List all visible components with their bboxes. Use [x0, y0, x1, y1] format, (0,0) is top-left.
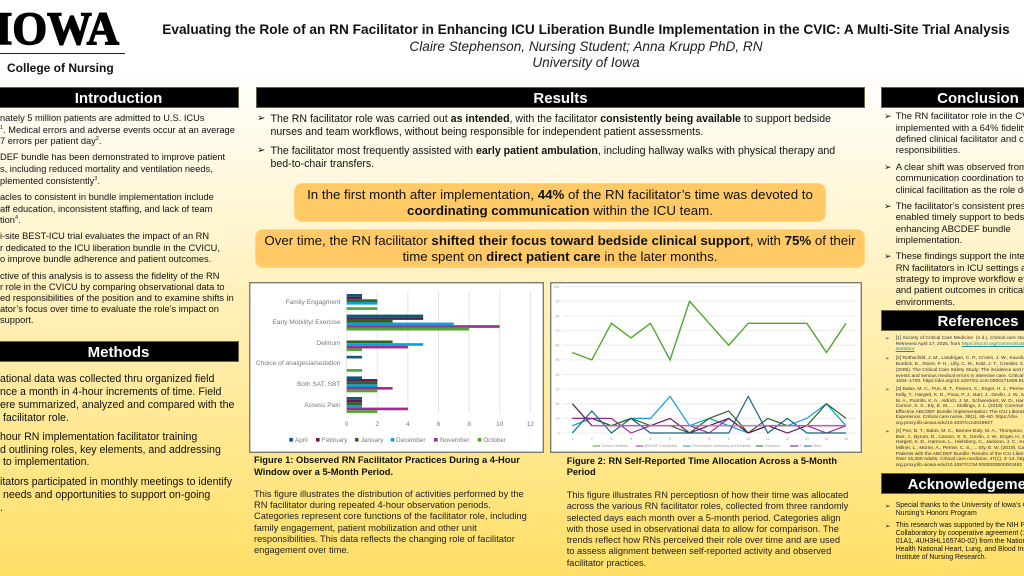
- value axis labels: 2: [376, 421, 380, 428]
- text: introduction paragraphs: nately 5 million patients are admitted to U.S. ICUs: [0, 113, 204, 123]
- legend: Clinical Facilitator: [601, 444, 629, 448]
- day axis labels: 4: [630, 437, 632, 441]
- day axis labels: 8: [708, 437, 710, 441]
- figure 2 description: across the various RN facilitator roles, collected from three randomly: [567, 501, 848, 511]
- college name: College of Nursing: [7, 61, 114, 75]
- figure 2 title: Period: [567, 467, 596, 477]
- callout: 75 percent direct patient care: [255, 229, 865, 268]
- legend: October: [483, 437, 507, 444]
- bullet: consistent presence: enhancing ABCDEF bundle: [896, 224, 1011, 235]
- caption: figure 1: [254, 455, 527, 555]
- value axis labels: 40: [556, 373, 560, 377]
- bullet: role carried out as intended: [257, 113, 831, 138]
- poster title: Evaluating the Role of an RN Facilitator in Enhancing ICU Liberation Bundle Implementation in the CVIC: A Multi-Site Trial Analysis: [162, 22, 1010, 37]
- text: introduction paragraphs: acles to consistent in bundle implementation include: [0, 192, 214, 202]
- reference 2: [885, 356, 1024, 384]
- reference 4: org.proxy.lib.uiowa.edu/10.1097/CCM.0000000000003482: [896, 463, 1022, 468]
- line chart: RN self-reported time allocation: [550, 282, 862, 453]
- text: introduction paragraphs: ed responsibilities of the position and to examine shifts in: [0, 293, 234, 303]
- text: introduction paragraphs: DEF bundle has been demonstrated to improve patient: [0, 152, 225, 162]
- series: ABCDEF Coordinator: [572, 418, 846, 433]
- heading: Methods: [0, 341, 239, 362]
- figure 1 title: Figure 1: Observed RN Facilitator Practices During a 4-Hour: [254, 455, 520, 465]
- value axis labels: 100: [554, 285, 560, 289]
- text: introduction paragraphs: r dedicated to the ICU liberation bundle in the CVICU,: [0, 243, 220, 253]
- series: Other: [572, 396, 846, 433]
- bullet: NIH funding: Institute of Nursing Research.: [896, 554, 986, 561]
- figure 1 description: RN facilitator during repeated 4-hour observation periods.: [254, 500, 491, 510]
- reference 3: ➢: [885, 387, 890, 393]
- text: methods paragraphs: to implementation.: [3, 456, 90, 468]
- legend: April: [295, 437, 308, 444]
- text: methods paragraphs: .: [0, 502, 3, 514]
- legend: January: [361, 437, 384, 444]
- text: introduction paragraphs: ator’s focus over time to evaluate the role’s impact on: [0, 304, 219, 314]
- figure 2 description: trends reflect how RNs perceived their role over time and are used: [567, 535, 840, 545]
- panel: methods: [0, 341, 239, 514]
- heading: Conclusion: Conclusion: [937, 90, 1019, 107]
- legend: Champion: [764, 444, 780, 448]
- legend: [593, 444, 822, 448]
- legend: February: [322, 437, 348, 444]
- text: methods paragraphs: hour RN implementation facilitator training: [0, 431, 197, 443]
- callout: 75 percent direct patient care: time spent on direct patient care in the later months.: [403, 249, 717, 264]
- reference 1: [885, 336, 1024, 352]
- text: methods paragraphs: d outlining roles, key elements, and addressing: [0, 444, 221, 456]
- series: December: [347, 302, 454, 408]
- figure 1 description: family engagement, patient mobilization and other unit: [254, 523, 477, 533]
- figure 2 title: Figure 2: RN Self-Reported Time Allocation Across a 5-Month: [567, 456, 837, 466]
- reference 4: [885, 428, 1024, 468]
- day axis labels: 2: [591, 437, 593, 441]
- series: November: [347, 325, 500, 410]
- value axis labels: 20: [556, 402, 560, 406]
- day axis labels: 3: [610, 437, 612, 441]
- series: April: [347, 294, 423, 400]
- bar chart: observed RN facilitator practices: [249, 282, 544, 453]
- text: introduction paragraphs: i-site BEST-ICU trial evaluates the impact of an RN: [0, 231, 209, 241]
- bullet: 64 percent fidelity: [884, 111, 1024, 156]
- category labels: Delirium: [316, 340, 341, 347]
- reference 3: [885, 386, 1024, 426]
- bullet: 64 percent fidelity: responsibilities.: [896, 145, 960, 156]
- authors: Claire Stephenson, Nursing Student; Anna Krupp PhD, RN: [409, 39, 763, 54]
- day axis labels: 12: [785, 437, 789, 441]
- text: methods paragraphs: ere summarized, analyzed and compared with the: [0, 399, 234, 411]
- figure 1 title: [254, 455, 520, 477]
- bullet: clear shift: communication coordination to: [896, 173, 1024, 184]
- day axis labels: 13: [805, 437, 809, 441]
- value axis labels: 10: [496, 421, 504, 428]
- text: introduction paragraphs: r role in the CVICU by comparing observational data to: [0, 282, 225, 292]
- heading: Methods: Methods: [88, 344, 149, 361]
- text: introduction paragraphs: ctive of this analysis is to assess the fidelity of the RN: [0, 271, 219, 281]
- heading: Introduction: Introduction: [75, 90, 162, 107]
- series: Champion: [572, 404, 846, 433]
- value axis labels: 30: [556, 387, 560, 391]
- category labels: [256, 299, 341, 409]
- text: introduction paragraphs: 7 errors per patient day2.: [0, 136, 101, 146]
- legend: November: [440, 437, 470, 444]
- value axis labels: 60: [556, 344, 560, 348]
- heading: Results: [256, 87, 865, 108]
- bullet: honors program thanks: Nursing’s Honors Program: [896, 510, 977, 517]
- bullet: findings support: [884, 251, 1024, 308]
- day axis labels: 9: [728, 437, 730, 441]
- bullet: clear shift: A clear shift was observed from: [896, 162, 1024, 173]
- callout: 75 percent direct patient care: Over time, the RN facilitator shifted their focus toward bedside clinical support, with 75% of their: [264, 233, 856, 248]
- value axis labels: 4: [406, 421, 410, 428]
- heading: References: References: [938, 313, 1018, 330]
- legend: Performance monitoring and feedback: [692, 444, 751, 448]
- text: methods paragraphs: nce a month in 4-hour increments of time. Field: [0, 386, 221, 398]
- text: methods paragraphs: facilitator role.: [3, 412, 69, 424]
- callout: 44 percent coordinating communication: [294, 183, 826, 222]
- text: methods paragraphs: [0, 373, 234, 514]
- bullet: clear shift: [884, 162, 1024, 196]
- day axis labels: 1: [571, 437, 573, 441]
- legend: [289, 437, 507, 444]
- heading: Results: Results: [533, 90, 588, 107]
- bullet: consistent presence: ➢: [884, 202, 892, 212]
- figure 2 description: to assess alignment between self-reported activity and observed: [567, 546, 831, 556]
- figure 2 description: selected days each month over a 5-month period. Categories align: [567, 513, 841, 523]
- text: introduction paragraphs: support.: [0, 315, 33, 325]
- day axis labels: 5: [650, 437, 652, 441]
- reference 2: ➢: [885, 356, 890, 362]
- reference 3: Experience. Critical care nurse, 39(1), 46–60. https://doi-: [896, 415, 1018, 420]
- value axis labels: 70: [556, 329, 560, 333]
- bullet: early patient ambulation: bed-to-chair transfers.: [270, 158, 374, 170]
- value axis labels: [554, 285, 560, 435]
- value axis labels: [345, 421, 534, 428]
- figure 1 description: This figure illustrates the distribution of activities performed by the: [254, 489, 524, 499]
- heading: Acknowledgements: [881, 473, 1024, 494]
- bullet: consistent presence: [884, 201, 1024, 246]
- day axis labels: 11: [766, 437, 770, 441]
- day axis labels: 14: [824, 437, 828, 441]
- bullet: findings support: ➢: [884, 252, 892, 262]
- figure 2 description: This figure illustrates RN perceptiosn of how their time was allocated: [567, 490, 848, 500]
- figure 1 description: [254, 489, 527, 555]
- day axis labels: 10: [746, 437, 750, 441]
- figure 2 description: with those used in observational data to allow for comparison. The: [567, 524, 839, 534]
- bullet: role carried out as intended: ➢: [257, 113, 265, 124]
- figure 1 description: responsibilities. This data reflects the changing role of facilitator: [254, 534, 515, 544]
- text: introduction paragraphs: o improve bundle adherence and patient outcomes.: [0, 254, 211, 264]
- bullet: NIH funding: [885, 522, 1024, 561]
- logo rule: [0, 53, 125, 54]
- series: Clinical Facilitator: [572, 301, 846, 360]
- bullet: role carried out as intended: nurses and team workflows, without being responsible for independent patient assessments.: [270, 126, 703, 138]
- callout: 44 percent coordinating communication: In the first month after implementation, 44% of the RN facilitator’s time was devoted to: [307, 187, 813, 202]
- legend: Other: [813, 444, 822, 448]
- category labels: Choice of analgesia/sedation: [256, 360, 341, 367]
- value axis labels: 0: [558, 431, 560, 435]
- bullet: findings support: environments.: [896, 297, 955, 308]
- title block: [162, 22, 1010, 70]
- bullet: clear shift: ➢: [884, 163, 892, 173]
- text: introduction paragraphs: tion4.: [0, 215, 21, 225]
- category labels: Family Engagment: [286, 299, 341, 306]
- day axis labels: 15: [844, 437, 848, 441]
- panel: references: [881, 310, 1024, 468]
- text: introduction paragraphs: 1. Medical errors and adverse events occur at an average: [0, 124, 235, 134]
- series: February: [347, 297, 423, 402]
- bullet: NIH funding: ➢: [885, 522, 890, 530]
- reference 1: ➢: [885, 336, 890, 342]
- text: introduction paragraphs: [0, 113, 235, 325]
- bullet: honors program thanks: [885, 502, 1024, 517]
- bullet: 64 percent fidelity: ➢: [884, 112, 892, 122]
- value axis labels: 10: [556, 417, 560, 421]
- category labels: Early Mobility/ Exercise: [272, 319, 341, 326]
- text: methods paragraphs: needs and opportunities to support on-going: [3, 489, 210, 501]
- figure 2 title: [567, 456, 837, 477]
- day axis labels: 6: [669, 437, 671, 441]
- heading: Introduction: [0, 87, 239, 108]
- value axis labels: 12: [527, 421, 534, 428]
- reference 1: statistics: [896, 347, 914, 352]
- value axis labels: 6: [437, 421, 441, 428]
- bullet: role carried out as intended: The RN facilitator role was carried out as intended, with the facilitator consistently being available to support bedside: [270, 113, 831, 125]
- figure 1 description: engagement over time.: [254, 545, 349, 555]
- bullet: early patient ambulation: The facilitator most frequently assisted with early patient ambulation, including hallway walks with physical therapy and: [270, 145, 835, 157]
- series: January: [347, 299, 393, 405]
- callout: 44 percent coordinating communication: coordinating communication within the ICU team.: [407, 203, 713, 218]
- bullet: consistent presence: implementation.: [896, 235, 962, 246]
- panel: conclusion: [881, 87, 1024, 308]
- value axis labels: 90: [556, 300, 560, 304]
- text: introduction paragraphs: aff education, inconsistent staffing, and lack of team: [0, 204, 212, 214]
- value axis labels: 0: [345, 421, 349, 428]
- panel: results: [255, 87, 865, 268]
- reference 3: org.proxy.lib.uiowa.edu/10.4037/ccn2019927: [896, 421, 993, 426]
- legend: ABCDEF Coordinator: [644, 444, 678, 448]
- caption: figure 2: [566, 456, 848, 568]
- value axis labels: 50: [556, 358, 560, 362]
- legend: December: [396, 437, 426, 444]
- panel: acknowledgements: [881, 473, 1024, 561]
- bullet: honors program thanks: ➢: [885, 502, 890, 510]
- text: introduction paragraphs: plemented consistently3.: [0, 175, 100, 186]
- series: October: [347, 307, 469, 413]
- category labels: Both SAT, SBT: [297, 381, 340, 388]
- series: S: [572, 404, 846, 433]
- text: introduction paragraphs: s, including reduced mortality and ventilation needs,: [0, 164, 213, 174]
- day axis labels: 7: [689, 437, 691, 441]
- affiliation: University of Iowa: [532, 55, 640, 70]
- heading: References: [881, 310, 1024, 331]
- figure 1 description: Categories represent core functions of the facilitator role, including: [254, 511, 527, 521]
- value axis labels: 80: [556, 314, 560, 318]
- legend: S: [799, 444, 802, 448]
- category labels: Assess Pain: [304, 402, 341, 409]
- heading: Conclusion: [881, 87, 1024, 108]
- value axis labels: 8: [467, 421, 471, 428]
- logo: University of Iowa College of Nursing: [0, 3, 125, 75]
- day axis labels: [571, 437, 848, 441]
- reference 4: ➢: [885, 429, 890, 435]
- text: methods paragraphs: ational data was collected thru organized field: [0, 373, 214, 385]
- text: methods paragraphs: itators participated in monthly meetings to identify: [0, 476, 232, 488]
- bullet: early patient ambulation: ➢: [257, 145, 265, 156]
- series: Performance monitoring and feedback: [572, 396, 846, 433]
- figure 2 description: facilitator practices.: [567, 558, 646, 568]
- figure 1 title: Window over a 5-Month Period.: [254, 467, 393, 477]
- series lines: [572, 301, 846, 433]
- figure 2 description: [566, 490, 848, 568]
- panel: introduction: [0, 87, 239, 325]
- bullet: early patient ambulation: [257, 145, 835, 170]
